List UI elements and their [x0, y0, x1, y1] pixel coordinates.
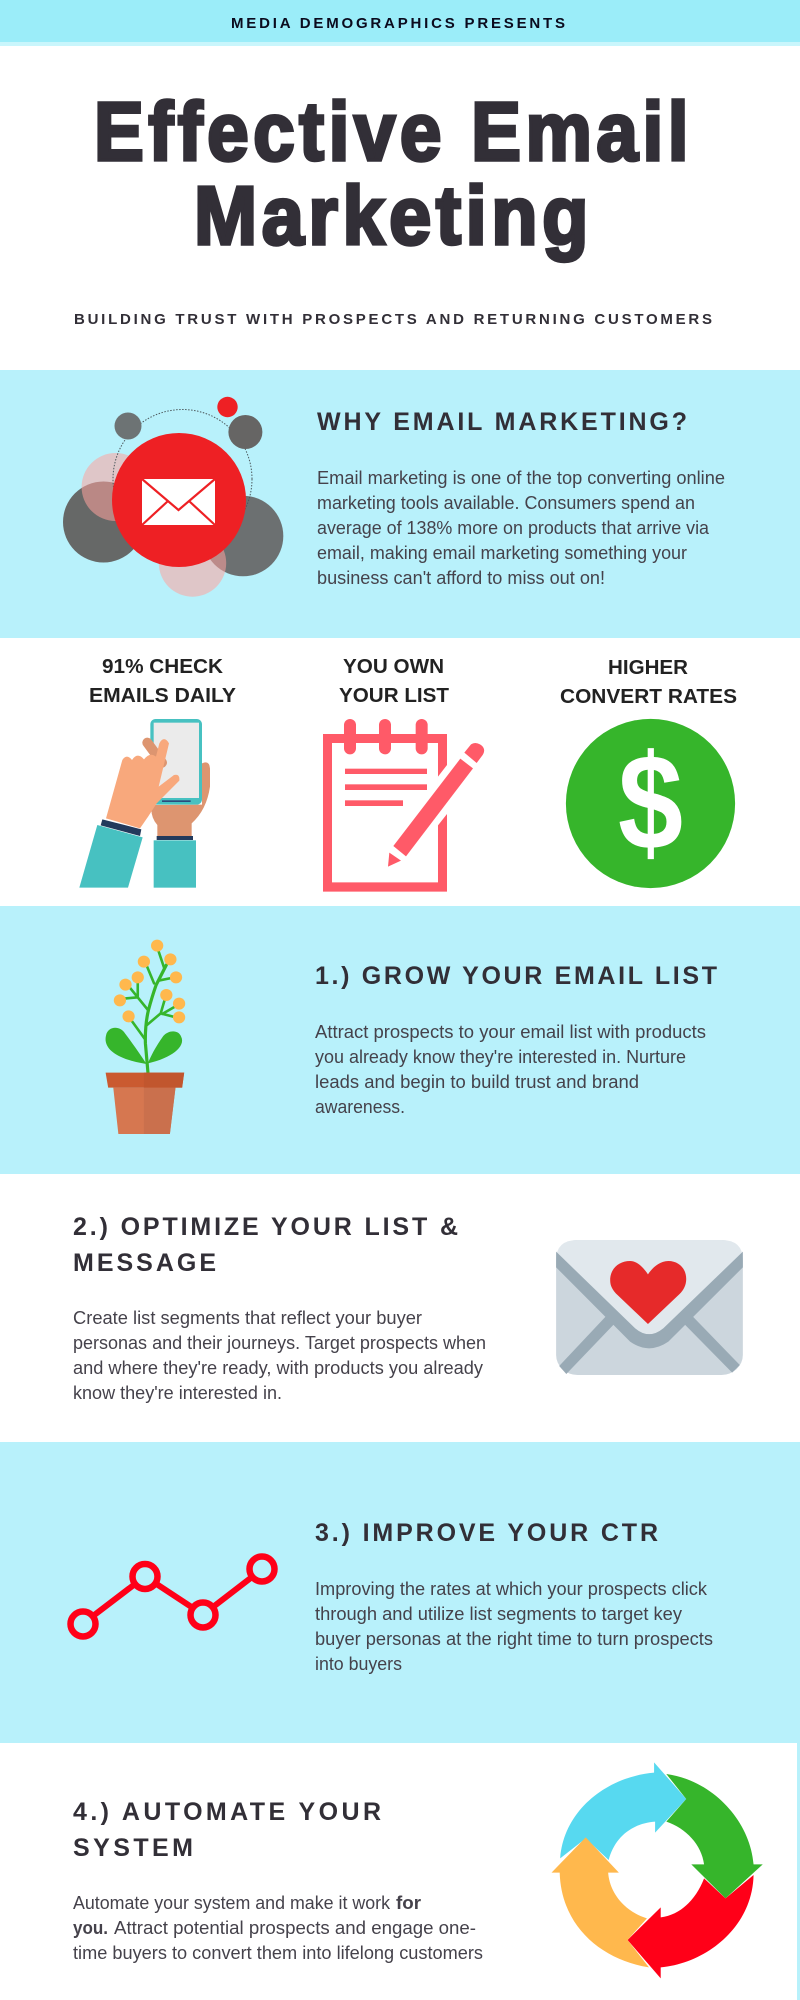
heading: MESSAGE	[73, 1249, 216, 1277]
body text: Improving the rates at which your prospects click	[315, 1579, 708, 1599]
heading: 4.) AUTOMATE YOUR	[73, 1798, 381, 1826]
title	[94, 85, 693, 262]
heading	[73, 1213, 458, 1277]
body text: through and utilize list segments to target key	[315, 1604, 682, 1624]
panel: automate your system	[73, 1743, 800, 2000]
heading: 1.) GROW YOUR EMAIL LIST	[315, 962, 717, 990]
column heading: 91% check emails daily: EMAILS DAILY	[89, 684, 236, 707]
column heading: higher convert rates: HIGHER	[608, 656, 688, 679]
body text	[73, 1308, 486, 1403]
icon: cycle arrows	[552, 1762, 763, 1978]
panel: optimize your list and message	[73, 1213, 743, 1403]
column heading: higher convert rates	[560, 656, 737, 708]
panel: three benefits	[79, 655, 737, 892]
body text: average of 138% more on products that arrive via	[317, 518, 710, 538]
body text: business can't afford to miss out on!	[317, 568, 605, 588]
column heading: 91% check emails daily	[89, 655, 236, 707]
heading: SYSTEM	[73, 1834, 193, 1862]
icon: line chart	[70, 1556, 274, 1636]
heading: 2.) OPTIMIZE YOUR LIST &	[73, 1213, 458, 1241]
banner text: MEDIA DEMOGRAPHICS PRESENTS	[231, 15, 565, 32]
body text: time buyers to convert them into lifelong customers	[73, 1943, 483, 1963]
panel: grow your email list	[0, 906, 800, 1174]
subtitle: BUILDING TRUST WITH PROSPECTS AND RETURNING CUSTOMERS	[74, 311, 712, 328]
panel: why email marketing	[0, 370, 800, 638]
title: Effective Email	[94, 85, 693, 178]
heading: WHY EMAIL MARKETING?	[317, 408, 687, 436]
icon: potted plant	[106, 940, 185, 1134]
body text: Email marketing is one of the top converting online	[317, 468, 725, 488]
body text: for	[396, 1893, 421, 1913]
body text: Attract potential prospects and engage one-	[114, 1918, 476, 1938]
body text: buyer personas at the right time to turn prospects	[315, 1629, 713, 1649]
body text: into buyers	[315, 1654, 402, 1674]
body text: leads and begin to build trust and brand	[315, 1072, 639, 1092]
heading	[73, 1798, 381, 1862]
icon: email circles	[63, 397, 283, 597]
icon: envelope with heart	[556, 1240, 743, 1375]
icon: dollar coin	[566, 719, 735, 888]
column heading: you own your list: YOUR LIST	[339, 684, 449, 707]
icon: dollar coin: $	[618, 726, 683, 878]
body text	[317, 468, 725, 588]
body text: marketing tools available. Consumers spend an	[317, 493, 695, 513]
body text	[73, 1893, 483, 1963]
body text: personas and their journeys. Target prospects when	[73, 1333, 486, 1353]
body text: awareness.	[315, 1097, 405, 1117]
body text: know they're interested in.	[73, 1383, 282, 1403]
body text: you already know they're interested in. Nurture	[315, 1047, 686, 1067]
body text: email, making email marketing something your	[317, 543, 687, 563]
icon: notepad and pencil	[323, 719, 484, 892]
body text: Automate your system and make it work	[73, 1893, 391, 1913]
icon: hands holding phone	[79, 719, 210, 888]
panel: improve your CTR	[0, 1442, 800, 1743]
column heading: you own your list: YOU OWN	[343, 655, 444, 678]
column heading: 91% check emails daily: 91% CHECK	[102, 655, 223, 678]
column heading: higher convert rates: CONVERT RATES	[560, 685, 737, 708]
body text: and where they're ready, with products you already	[73, 1358, 483, 1378]
body text: Create list segments that reflect your buyer	[73, 1308, 422, 1328]
body text	[315, 1022, 706, 1117]
body text: you.	[73, 1918, 108, 1938]
top banner	[0, 0, 800, 46]
title: Marketing	[194, 169, 593, 262]
body text	[315, 1579, 713, 1674]
body text: Attract prospects to your email list with products	[315, 1022, 706, 1042]
heading: 3.) IMPROVE YOUR CTR	[315, 1519, 658, 1547]
column heading: you own your list	[339, 655, 449, 707]
